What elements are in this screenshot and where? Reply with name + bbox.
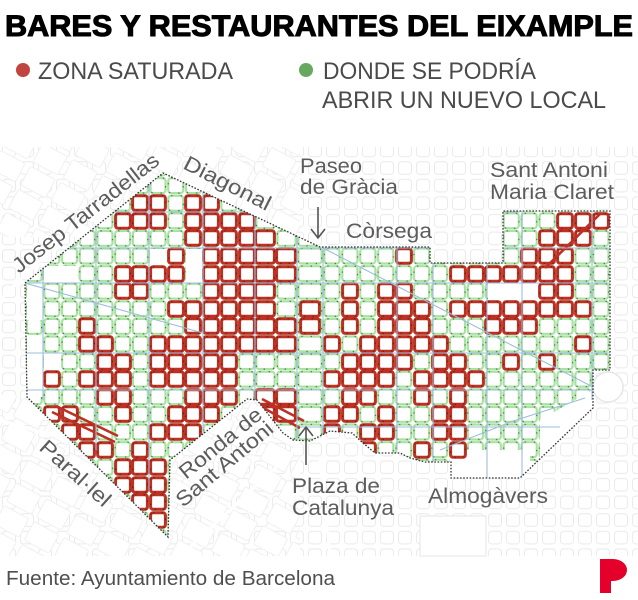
source: Fuente: Ayuntamiento de Barcelona	[6, 568, 336, 590]
map label: Josep Tarradellas: Josep Tarradellas	[8, 149, 164, 278]
map label: Còrsega: Còrsega	[346, 220, 432, 243]
saturated red blocks	[45, 196, 608, 527]
map label: Sant Antoni Maria Claret: Sant Antoni	[490, 159, 608, 182]
legend	[16, 58, 606, 114]
map	[0, 147, 638, 556]
map label: Diagonal: Diagonal	[180, 152, 275, 216]
map label: Plaza de Catalunya: Catalunya	[292, 497, 394, 520]
map background streets	[0, 147, 638, 556]
Eixample district zone	[20, 160, 620, 550]
arrow: down to Passeig de Gràcia	[311, 207, 325, 238]
arrow: up to Plaça de Catalunya	[299, 427, 313, 465]
legend label: saturated zone: ZONA SATURADA	[38, 58, 233, 85]
legend label: open new venue	[322, 58, 606, 114]
legend dot: saturated zone	[16, 63, 30, 77]
district boundary	[25, 173, 610, 537]
legend label: open new venue: ABRIR UN NUEVO LOCAL	[322, 87, 606, 114]
map label: Plaza de Catalunya: Plaza de	[292, 475, 380, 498]
map label: Ronda de Sant Antoni: Sant Antoni	[171, 417, 278, 512]
legend label: open new venue: DONDE SE PODRÍA	[323, 58, 536, 85]
map label: Almogàvers: Almogàvers	[428, 485, 548, 508]
legend dot: open new venue	[299, 63, 313, 77]
logo	[600, 559, 627, 593]
map label: Paseo de Gràcia	[300, 155, 398, 199]
map label: Sant Antoni Maria Claret	[490, 159, 614, 204]
map label: Plaza de Catalunya	[292, 475, 394, 520]
green blocks	[20, 160, 613, 550]
map label: Ronda de Sant Antoni: Ronda de	[175, 403, 267, 484]
map label: Paseo de Gràcia: de Gràcia	[300, 176, 398, 199]
title: BARES Y RESTAURANTES DEL EIXAMPLE	[5, 10, 633, 43]
map label: Sant Antoni Maria Claret: Maria Claret	[490, 181, 614, 204]
map label: Paral·lel: Paral·lel	[35, 436, 115, 512]
map label: Paseo de Gràcia: Paseo	[300, 155, 362, 178]
blue main streets	[25, 170, 610, 490]
